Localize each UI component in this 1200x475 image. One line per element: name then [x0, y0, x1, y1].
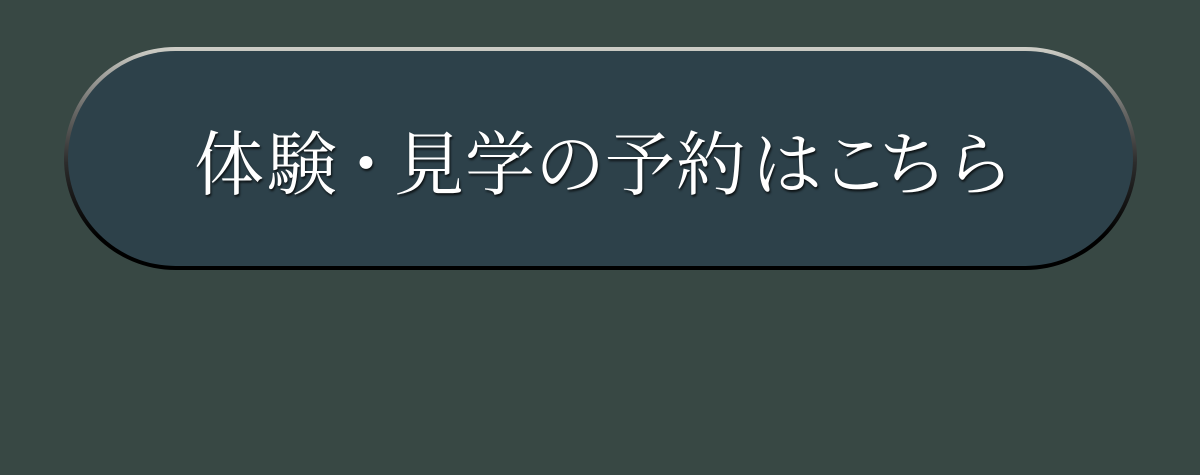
button label: ・ [331, 128, 401, 205]
button label: は [752, 128, 822, 205]
button label: の [535, 128, 605, 205]
button label: 予 [605, 128, 675, 205]
button: reservation call to action [64, 47, 1137, 270]
button label: ち [878, 128, 948, 205]
button label [194, 128, 1014, 205]
button label: 約 [676, 128, 746, 205]
button label: 体 [194, 128, 264, 205]
button label: 見 [394, 128, 464, 205]
button label: ら [944, 128, 1014, 205]
button fill [68, 51, 1133, 266]
button label: 験 [267, 128, 337, 205]
button label: 学 [465, 128, 535, 205]
button label: こ [820, 128, 890, 205]
